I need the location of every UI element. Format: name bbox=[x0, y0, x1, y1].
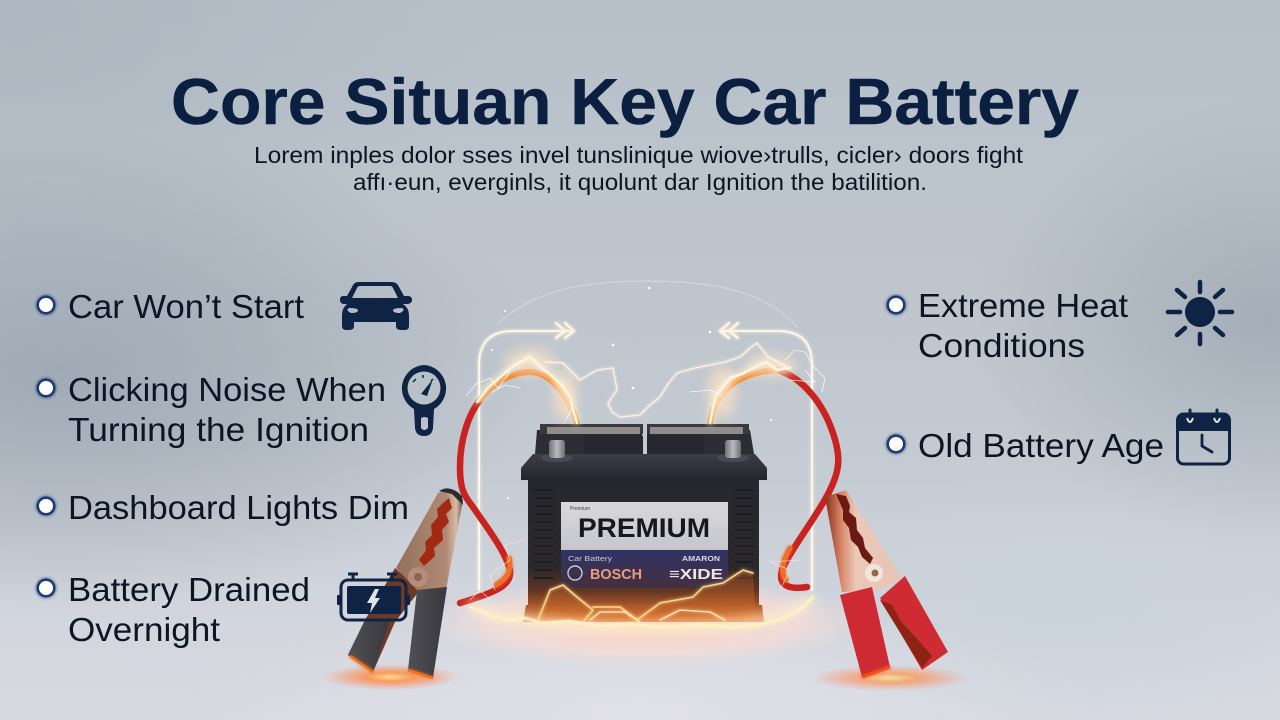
battery bbox=[521, 424, 767, 622]
item: Clicking Noise When: Turning the Ignition bbox=[68, 411, 369, 448]
battery body bbox=[528, 480, 759, 608]
right list bbox=[886, 282, 1232, 464]
right jumper clamp bbox=[810, 490, 970, 691]
left list bbox=[36, 282, 446, 648]
jumper cables bbox=[460, 370, 838, 603]
battery top blocks bbox=[535, 424, 754, 463]
dome and frame with arrows bbox=[479, 281, 812, 590]
heated lower battery bbox=[538, 570, 756, 620]
left grip bbox=[348, 620, 390, 672]
icon: calendar bbox=[1177, 410, 1230, 464]
subtitle text: Lorem inples dolor sses invel tunslinique wiove›trulls, cicler› doors fight bbox=[254, 142, 1024, 168]
upper jaw bbox=[396, 489, 463, 590]
upper jaw bbox=[825, 490, 902, 592]
icon: car bbox=[340, 282, 412, 330]
icon: battery bbox=[337, 574, 410, 620]
cable: left bbox=[460, 400, 510, 603]
battery label: Premium bbox=[570, 506, 590, 512]
cable: right bbox=[777, 370, 838, 588]
subtitle text: affı·eun, everginls, it quolunt dar Ignition the batilition. bbox=[353, 169, 927, 195]
sparks bbox=[491, 287, 772, 499]
title: Core Situan Key Car Battery bbox=[171, 65, 1079, 138]
floor glow bbox=[420, 578, 870, 666]
right grip bbox=[408, 587, 447, 678]
item: Clicking Noise When: Clicking Noise When bbox=[68, 371, 386, 408]
battery label: PREMIUM bbox=[578, 513, 710, 543]
item: Battery Drained Overnight: Overnight bbox=[68, 611, 220, 648]
battery label bbox=[561, 502, 728, 588]
item: Clicking Noise When bbox=[36, 371, 386, 448]
arrow: left-pointing chevrons bbox=[720, 323, 738, 338]
item: Extreme Heat Conditions bbox=[886, 287, 1128, 364]
arrow: right-pointing chevrons bbox=[556, 323, 574, 338]
battery label: Car Battery bbox=[568, 556, 613, 563]
item: Battery Drained Overnight: Battery Drained bbox=[68, 571, 310, 608]
battery base bbox=[523, 605, 764, 622]
item: Car Won't Start: Car Won’t Start bbox=[68, 288, 304, 325]
left grip bbox=[840, 587, 890, 677]
battery terminals bbox=[541, 440, 749, 462]
icon: sun bbox=[1168, 282, 1232, 344]
pivot bbox=[865, 564, 883, 582]
battery label: BOSCH bbox=[590, 566, 642, 583]
item: Dashboard Lights Dim: Dashboard Lights Dim bbox=[68, 489, 409, 526]
item: Battery Drained Overnight bbox=[36, 571, 310, 648]
item: Extreme Heat Conditions: Extreme Heat bbox=[918, 287, 1128, 324]
icon: gauge bbox=[402, 365, 446, 436]
left jumper clamp bbox=[322, 488, 463, 690]
pivot bbox=[408, 567, 428, 587]
lightning: top arcs bbox=[466, 343, 825, 423]
battery label: AMARON bbox=[682, 556, 720, 563]
item: Extreme Heat Conditions: Conditions bbox=[918, 327, 1085, 364]
lower jaw bbox=[348, 568, 420, 672]
lightning: bottom ring bbox=[470, 540, 813, 628]
subtitle text bbox=[254, 142, 1024, 195]
battery label: ≡XIDE bbox=[669, 566, 723, 583]
battery lid bbox=[521, 454, 767, 480]
item: Old Battery Age: Old Battery Age bbox=[918, 427, 1164, 464]
jaw teeth bbox=[836, 494, 873, 564]
lower jaw bbox=[880, 576, 948, 670]
jaw teeth bbox=[419, 498, 452, 566]
